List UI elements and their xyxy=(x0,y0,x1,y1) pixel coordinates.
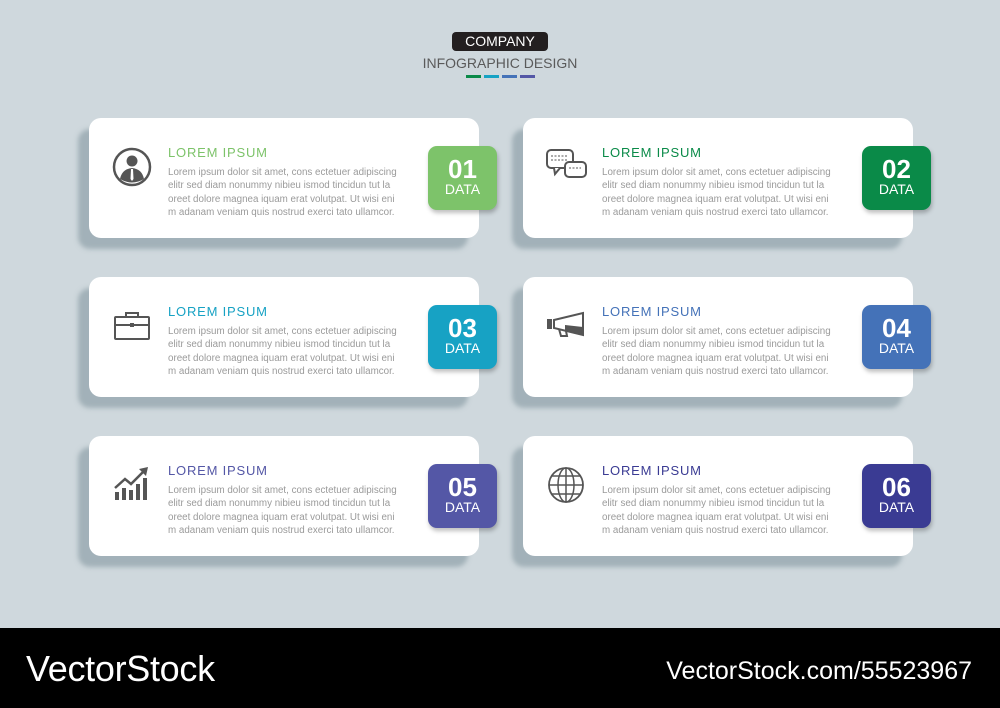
text: m adanam veniam quis nostrud exerci tato ullamcor. xyxy=(602,525,829,536)
badge 05: DATA xyxy=(445,499,480,515)
text xyxy=(168,485,397,536)
text: Lorem ipsum dolor sit amet, cons ectetuer adipiscing xyxy=(602,485,831,496)
text: elitr sed diam nonummy nibieu ismod tincidun tut la xyxy=(602,498,824,509)
header: subtitle: INFOGRAPHIC DESIGN xyxy=(423,55,577,71)
text xyxy=(602,485,831,536)
heading: LOREM IPSUM xyxy=(602,463,702,478)
badge 04: 04 xyxy=(882,313,911,343)
text: m adanam veniam quis nostrud exerci tato ullamcor. xyxy=(168,366,395,377)
text: oreet dolore magnea iquam erat volutpat. Ut wisi eni xyxy=(602,512,829,523)
text: Lorem ipsum dolor sit amet, cons ectetuer adipiscing xyxy=(602,326,831,337)
badge 06 xyxy=(862,464,931,528)
text: elitr sed diam nonummy nibieu ismod tincidun tut la xyxy=(602,339,824,350)
panel: 02 xyxy=(523,118,913,238)
panel: 03 xyxy=(89,277,479,397)
badge 02: DATA xyxy=(879,181,914,197)
badge 06: DATA xyxy=(879,499,914,515)
footer logo: VectorStock xyxy=(26,648,215,689)
panel: 04 xyxy=(523,277,913,397)
icon: megaphone xyxy=(547,312,584,337)
heading: LOREM IPSUM xyxy=(168,463,268,478)
footer id: VectorStock.com/55523967 xyxy=(666,657,972,685)
badge 03: 03 xyxy=(448,313,477,343)
text xyxy=(602,326,831,377)
text: oreet dolore magnea iquam erat volutpat. Ut wisi eni xyxy=(168,353,395,364)
text: oreet dolore magnea iquam erat volutpat. Ut wisi eni xyxy=(602,353,829,364)
text: oreet dolore magnea iquam erat volutpat. Ut wisi eni xyxy=(168,512,395,523)
heading: LOREM IPSUM xyxy=(602,145,702,160)
icon: briefcase xyxy=(114,312,150,340)
text: m adanam veniam quis nostrud exerci tato ullamcor. xyxy=(168,207,395,218)
text: oreet dolore magnea iquam erat volutpat. Ut wisi eni xyxy=(168,194,395,205)
text: m adanam veniam quis nostrud exerci tato ullamcor. xyxy=(168,525,395,536)
badge 04 xyxy=(862,305,931,369)
text xyxy=(168,167,397,218)
text: Lorem ipsum dolor sit amet, cons ectetuer adipiscing xyxy=(602,167,831,178)
header: color dashes xyxy=(466,75,535,78)
text: elitr sed diam nonummy nibieu ismod tincidun tut la xyxy=(168,339,390,350)
text: oreet dolore magnea iquam erat volutpat. Ut wisi eni xyxy=(602,194,829,205)
text: Lorem ipsum dolor sit amet, cons ectetuer adipiscing xyxy=(168,326,397,337)
panel: 05 xyxy=(89,436,479,556)
text xyxy=(602,167,831,218)
footer bar xyxy=(0,628,1000,708)
text: elitr sed diam nonummy nibieu ismod tincidun tut la xyxy=(168,180,390,191)
icon: chat xyxy=(546,149,587,178)
badge 04: DATA xyxy=(879,340,914,356)
header: company label: COMPANY xyxy=(465,33,535,49)
badge 01: DATA xyxy=(445,181,480,197)
text xyxy=(168,326,397,377)
badge 02: 02 xyxy=(882,154,911,184)
badge 05 xyxy=(428,464,497,528)
icon: chart xyxy=(114,467,148,500)
panel: 06 xyxy=(523,436,913,556)
text: m adanam veniam quis nostrud exerci tato ullamcor. xyxy=(602,366,829,377)
text: m adanam veniam quis nostrud exerci tato ullamcor. xyxy=(602,207,829,218)
badge 01 xyxy=(428,146,497,210)
header: company label xyxy=(452,32,548,51)
badge 02 xyxy=(862,146,931,210)
text: elitr sed diam nonummy nibieu ismod tincidun tut la xyxy=(602,180,824,191)
badge 03 xyxy=(428,305,497,369)
badge 03: DATA xyxy=(445,340,480,356)
badge 05: 05 xyxy=(448,472,477,502)
text: Lorem ipsum dolor sit amet, cons ectetuer adipiscing xyxy=(168,485,397,496)
text: Lorem ipsum dolor sit amet, cons ectetuer adipiscing xyxy=(168,167,397,178)
badge 06: 06 xyxy=(882,472,911,502)
panel: 01 xyxy=(89,118,479,238)
icon: globe xyxy=(548,467,584,503)
heading: LOREM IPSUM xyxy=(602,304,702,319)
badge 01: 01 xyxy=(448,154,477,184)
text: elitr sed diam nonummy nibieu ismod tincidun tut la xyxy=(168,498,390,509)
heading: LOREM IPSUM xyxy=(168,145,268,160)
icon: person xyxy=(112,148,152,186)
heading: LOREM IPSUM xyxy=(168,304,268,319)
